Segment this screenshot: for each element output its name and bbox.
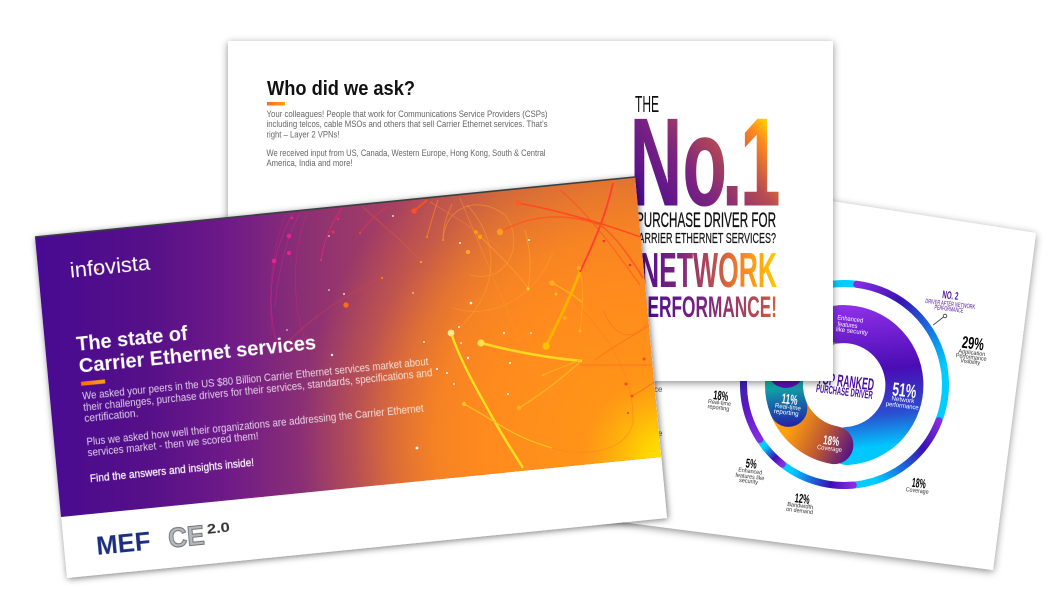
cover body text: Plus we asked how well their organizations are addressing the Carrier Ethernet	[86, 403, 424, 448]
body text	[266, 109, 548, 168]
donut inner labels: Network	[891, 395, 915, 405]
donut outer labels: Performance	[955, 353, 987, 363]
body text: Your colleagues! People that work for Communications Service Providers (CSPs)	[266, 109, 548, 119]
donut centre title	[815, 369, 875, 402]
donut inner labels: Coverage	[817, 444, 843, 454]
donut inner labels: Enhanced	[837, 314, 864, 325]
inner donut chart	[784, 324, 904, 446]
donut inner labels	[773, 314, 919, 454]
callout: number 2 driver: PERFORMANCE	[934, 304, 964, 315]
donut outer labels: 29%	[961, 333, 985, 354]
donut inner labels: performance	[885, 401, 919, 412]
donut inner labels: reporting	[773, 408, 799, 418]
outer ring chart	[743, 284, 946, 486]
cover body text: services market - then we scored them!	[87, 430, 259, 459]
call to action: Find the answers and insights inside!	[90, 457, 255, 485]
headline: the no. 1 purchase driver: PERFORMANCE!	[636, 291, 777, 324]
donut outer labels: on demand	[786, 507, 813, 516]
cover title	[75, 309, 317, 378]
body text: right – Layer 2 VPNs!	[266, 130, 340, 140]
gradient banner	[35, 177, 661, 517]
donut inner labels: 18%	[822, 432, 840, 449]
logo: CE 2.0	[167, 516, 232, 554]
callout: number 2 driver: NO. 2	[942, 289, 959, 303]
body text: America, India and more!	[266, 158, 352, 168]
network line decoration	[271, 183, 660, 468]
donut inner labels: Real-time	[775, 402, 802, 413]
headline: the no. 1 purchase driver: No. 1	[630, 94, 780, 232]
donut outer labels: Enhanced	[738, 468, 762, 476]
panel: front cover page	[35, 177, 667, 578]
headline: the no. 1 purchase driver: THE	[635, 91, 659, 117]
cover title: The state of	[75, 322, 189, 356]
donut inner labels: 51%	[891, 379, 918, 403]
title accent bar	[81, 379, 105, 386]
panel: who did we ask page	[228, 41, 833, 381]
heading accent bar	[267, 102, 285, 106]
headline: the no. 1 purchase driver: NETWORK	[640, 244, 777, 298]
cover sheet	[35, 177, 667, 578]
logo: infovista: infovista	[69, 252, 151, 283]
dark top edge	[35, 177, 635, 237]
callout: number 2 driver	[925, 289, 976, 325]
donut outer labels: security	[739, 478, 758, 486]
donut outer labels: Coverage	[905, 487, 929, 496]
donut outer labels: 18%	[911, 475, 927, 491]
donut outer labels: Bandwidth	[787, 502, 813, 511]
donut inner labels: features	[837, 321, 858, 330]
headline: the no. 1 purchase driver: CARRIER ETHERNET SERVICES?	[632, 231, 776, 247]
heading: Who did we ask?	[267, 78, 415, 100]
logo: CE 2.0: CE	[167, 519, 206, 554]
cover body text: certification.	[84, 407, 139, 425]
donut outer labels: Visibility	[960, 358, 980, 367]
cover body text: We asked your peers in the US $80 Billion Carrier Ethernet services market about	[82, 356, 429, 403]
hidden label fragments: ce	[654, 385, 663, 394]
donut centre title: PURCHASE DRIVER	[815, 383, 874, 402]
callout: number 2 driver: DRIVER AFTER NETWORK	[925, 298, 976, 311]
donut inner labels: like security	[836, 326, 869, 337]
donut outer labels	[707, 333, 987, 516]
headline: the no. 1 purchase driver: PURCHASE DRIVER FOR	[636, 208, 776, 232]
hidden label fragments: e	[658, 429, 663, 438]
cover body text: their challenges, purchase drivers for their services, standards, specifications and	[83, 367, 433, 414]
donut outer labels: Real-time	[708, 399, 732, 408]
hidden label fragments	[654, 385, 663, 438]
panel: donut chart page	[560, 165, 1036, 570]
donut outer labels: 12%	[794, 490, 811, 507]
donut inner labels: 11%	[781, 390, 799, 408]
headline: the no. 1 purchase driver	[630, 91, 780, 324]
donut outer labels: features like	[735, 473, 765, 482]
page sheet	[560, 165, 1036, 570]
logo: CE 2.0: 2.0	[206, 518, 231, 537]
logo: MEF: MEF	[95, 526, 152, 561]
donut outer labels: 18%	[712, 387, 729, 404]
body text: We received input from US, Canada, Western Europe, Hong Kong, South & Central	[266, 148, 546, 158]
donut outer labels: Application	[958, 349, 986, 358]
cover title: Carrier Ethernet services	[78, 331, 317, 378]
donut outer labels: 5%	[745, 455, 758, 472]
page sheet	[228, 41, 833, 381]
body text: including telcos, cable MSOs and others that sell Carrier Ethernet services. That’s	[266, 119, 548, 129]
donut outer labels: reporting	[707, 404, 730, 413]
cover body text	[82, 356, 437, 459]
donut centre title: TOP RANKED	[816, 369, 875, 394]
front cover content	[68, 225, 447, 561]
